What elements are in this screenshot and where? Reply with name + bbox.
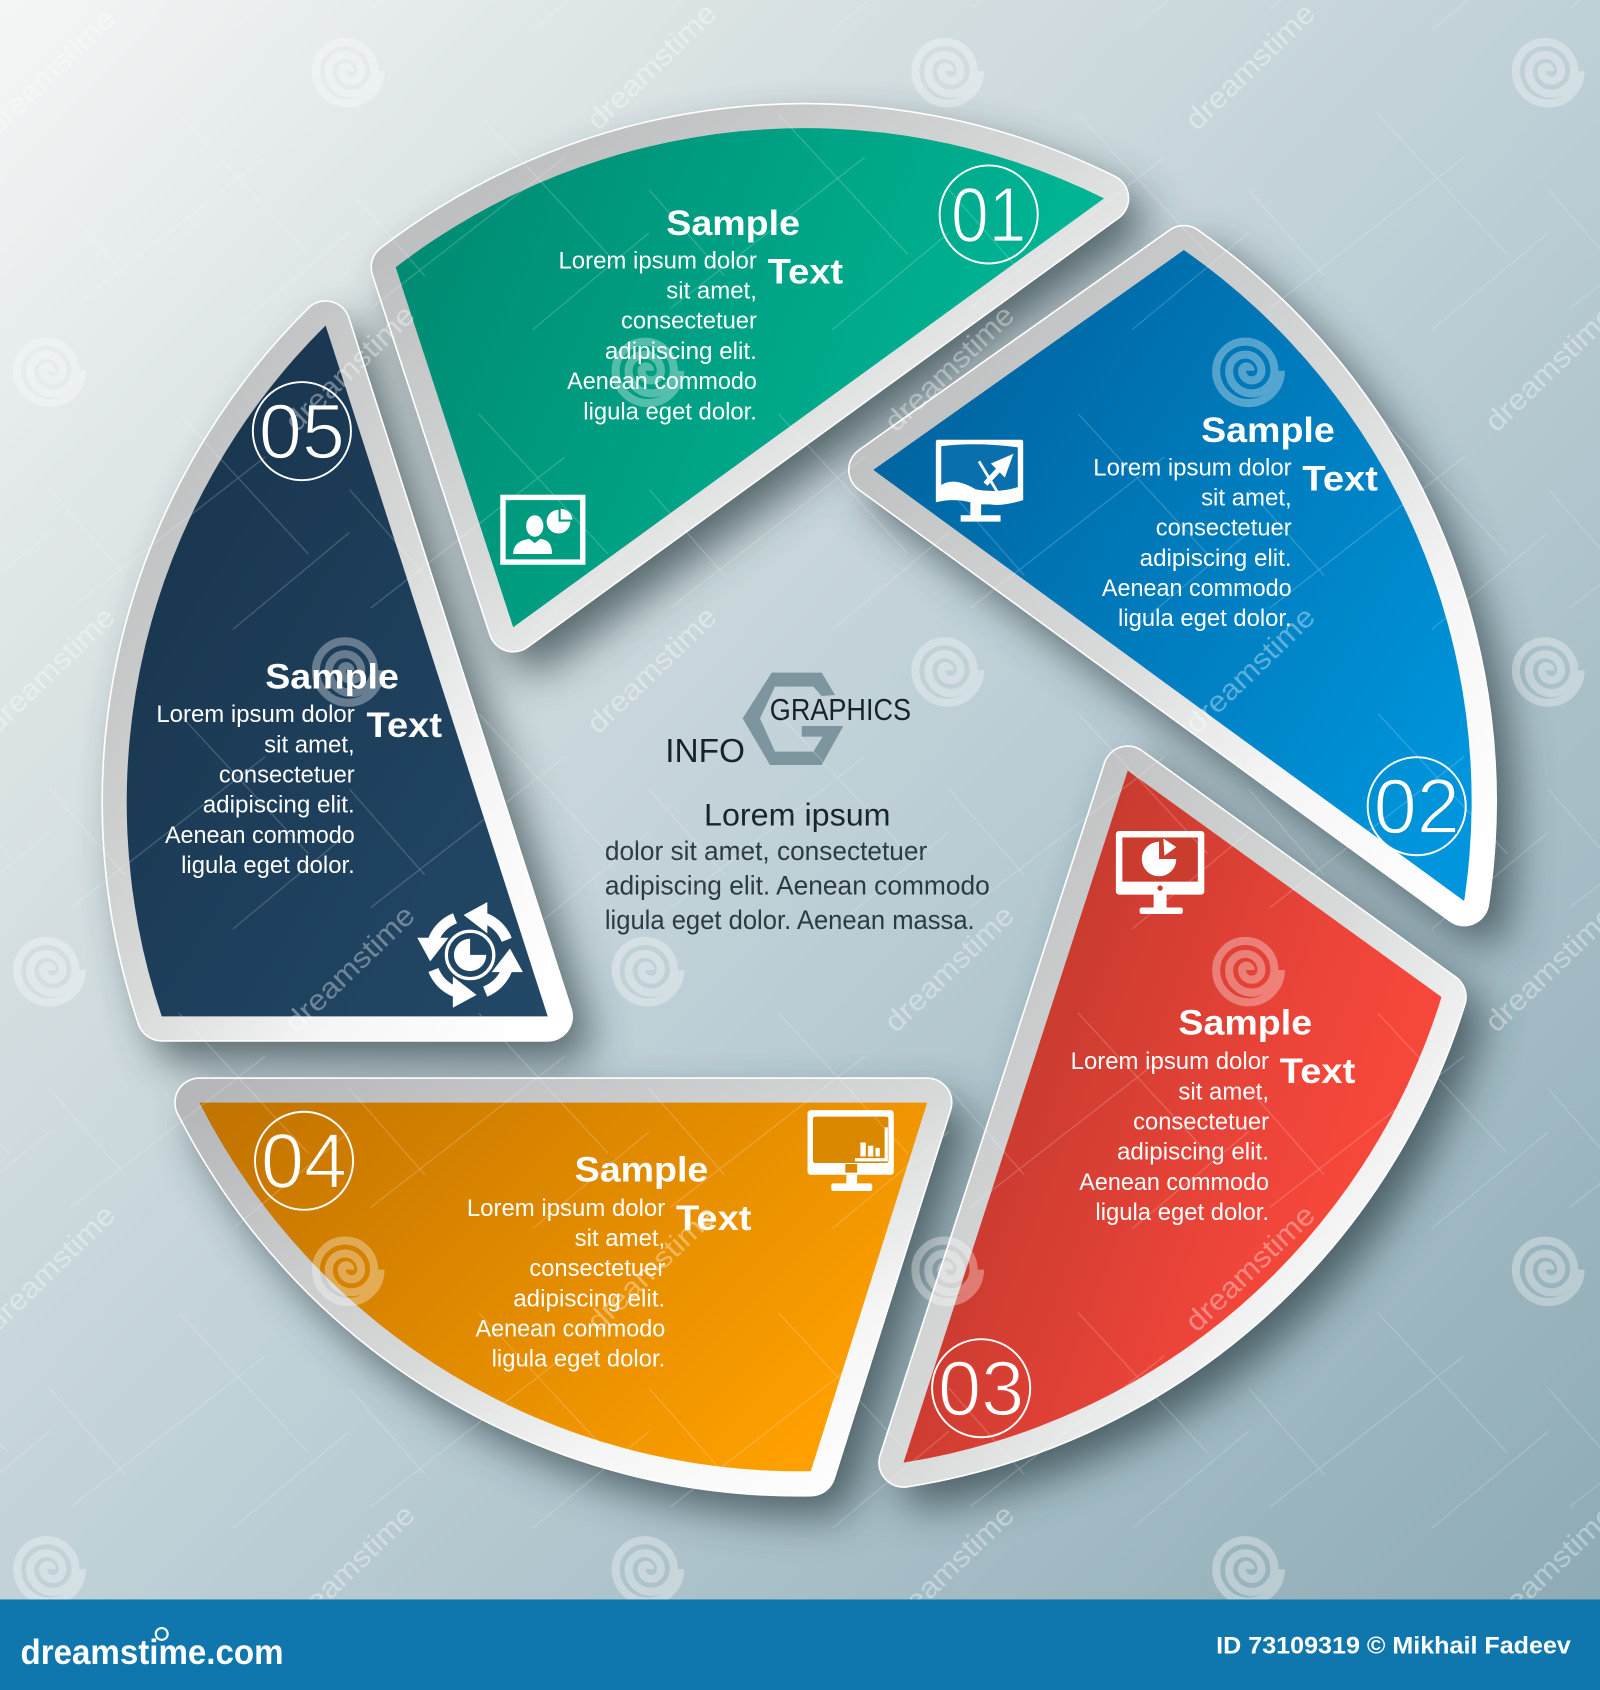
text block 03: [1071, 1003, 1355, 1226]
icon: monitor with arrow: [936, 440, 1023, 522]
panel drop shadows: [146, 150, 1491, 1493]
text block 04: adipiscing elit.: [513, 1286, 665, 1312]
watermark overlay: lines, spirals and diagonal text: dreamstime: [581, 1199, 723, 1338]
number badge 05: 05: [259, 389, 345, 475]
text block 05: Aenean commodo: [165, 823, 355, 849]
panel 03: red segment: [904, 771, 1442, 1463]
footer logo: dreamstime.com: [20, 1632, 284, 1672]
watermark overlay: lines, spirals and diagonal text: dreamstime: [1179, 0, 1322, 137]
centre text block: ligula eget dolor. Aenean massa.: [605, 905, 975, 935]
text block 04: Sample: [575, 1149, 708, 1189]
panel 02: blue segment: [873, 250, 1472, 901]
text block 01: Aenean commodo: [567, 369, 757, 395]
text block 01: Sample: [666, 203, 800, 243]
centre logo: hexagon G with INFO GRAPHICS: GRAPHICS: [770, 694, 911, 727]
watermark overlay: lines, spirals and diagonal text: dreamstime: [879, 900, 1021, 1039]
text block 02: Lorem ipsum dolor: [1093, 455, 1292, 481]
text block 01: sit amet,: [666, 279, 757, 305]
text block 02: ligula eget dolor.: [1118, 606, 1292, 632]
number badge 01: 01: [951, 172, 1026, 258]
panel 05: navy segment: [127, 325, 548, 1016]
text block 04: ligula eget dolor.: [492, 1347, 665, 1373]
number badge 04: 04: [261, 1119, 347, 1205]
icon: presenter with pie chart: [503, 497, 583, 562]
icon: circular arrows around clock: [417, 902, 523, 1008]
text block 04: Text: [676, 1198, 752, 1238]
text block 04: [467, 1149, 752, 1373]
text block 03: Text: [1280, 1051, 1355, 1091]
centre logo: hexagon G with INFO GRAPHICS: INFO: [665, 733, 745, 770]
footer credit: ID 73109319 © Mikhail Fadeev: [1216, 1633, 1572, 1659]
text block 04: Aenean commodo: [475, 1316, 665, 1342]
centre logo: hexagon G with INFO GRAPHICS: [665, 673, 911, 770]
text block 02: [1093, 410, 1378, 632]
text block 03: consectetuer: [1133, 1110, 1269, 1136]
text block 03: Sample: [1178, 1003, 1312, 1043]
centre text block: [605, 798, 990, 935]
number badge 02: 02: [1374, 764, 1460, 850]
icon: monitor with pie chart: [1116, 831, 1204, 914]
text block 01: Lorem ipsum dolor: [558, 248, 757, 274]
text block 05: adipiscing elit.: [203, 793, 355, 819]
text block 02: Text: [1302, 458, 1378, 498]
text block 03: Lorem ipsum dolor: [1071, 1049, 1269, 1075]
centre text block: Lorem ipsum: [704, 798, 891, 833]
text block 05: Text: [367, 705, 442, 745]
icon: monitor with bar chart: [808, 1110, 894, 1191]
text block 01: ligula eget dolor.: [583, 399, 757, 425]
watermark overlay: lines, spirals and diagonal text: dreamstime: [279, 900, 422, 1039]
number badge 03: 03: [938, 1346, 1024, 1432]
text block 02: sit amet,: [1201, 485, 1292, 511]
text block 02: Sample: [1201, 410, 1335, 450]
watermark overlay: lines, spirals and diagonal text: dreamstime: [879, 299, 1021, 438]
text block 05: ligula eget dolor.: [181, 853, 355, 879]
text block 05: sit amet,: [264, 732, 355, 758]
text block 02: Aenean commodo: [1102, 576, 1292, 602]
centre text block: dolor sit amet, consectetuer: [605, 836, 927, 866]
centre text block: adipiscing elit. Aenean commodo: [605, 871, 990, 901]
watermark overlay: lines, spirals and diagonal text: dreamstime: [581, 0, 723, 137]
text block 01: consectetuer: [621, 309, 757, 335]
text block 01: [558, 203, 843, 425]
panel 04: orange segment: [199, 1103, 927, 1471]
text block 05: Lorem ipsum dolor: [156, 702, 355, 728]
text block 04: consectetuer: [529, 1256, 665, 1282]
text block 03: sit amet,: [1178, 1079, 1269, 1105]
watermark overlay: lines, spirals and diagonal text: dreamstime: [581, 601, 723, 740]
text block 04: Lorem ipsum dolor: [467, 1196, 665, 1222]
text block 01: Text: [768, 251, 843, 291]
text block 03: adipiscing elit.: [1117, 1140, 1269, 1166]
watermark overlay: lines, spirals and diagonal text: dreamstime: [279, 1499, 422, 1638]
text block 03: Aenean commodo: [1079, 1170, 1269, 1196]
text block 04: sit amet,: [575, 1226, 665, 1252]
text block 05: [156, 657, 442, 879]
text block 05: Sample: [265, 657, 399, 697]
text block 05: consectetuer: [219, 762, 355, 788]
watermark overlay: lines, spirals and diagonal text: dreamstime: [1179, 1199, 1322, 1338]
text block 01: adipiscing elit.: [605, 339, 757, 365]
panel 01: green segment: [396, 128, 1104, 627]
watermark overlay: lines, spirals and diagonal text: dreamstime: [279, 299, 422, 438]
text block 02: consectetuer: [1156, 516, 1292, 542]
watermark overlay: lines, spirals and diagonal text: dreamstime: [1179, 601, 1322, 740]
watermark overlay: lines, spirals and diagonal text: dreamstime: [879, 1499, 1021, 1638]
footer bar: [0, 1599, 1600, 1690]
text block 03: ligula eget dolor.: [1095, 1200, 1269, 1226]
text block 02: adipiscing elit.: [1140, 546, 1292, 572]
